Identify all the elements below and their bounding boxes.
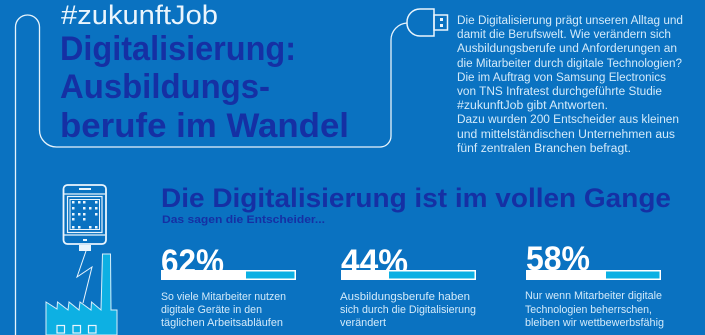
intro text block: Die Digitalisierung prägt unseren Alltag und	[457, 15, 683, 27]
stat: 44%: verändert	[340, 317, 386, 329]
stat: 58%: 58%	[526, 240, 590, 278]
section subheading: Das sagen die Entscheider...	[162, 214, 325, 226]
intro text block: damit die Berufswelt. Wie verändern sich	[457, 29, 671, 41]
stat: 58%	[525, 240, 664, 329]
title: Digitalisierung:	[60, 30, 296, 68]
cable line	[16, 15, 407, 335]
stat: 44%	[340, 243, 476, 329]
icon: tablet with charger	[64, 185, 106, 251]
stat: 62%	[161, 243, 296, 329]
icon: factory with lightning cable	[46, 251, 117, 335]
stat: 44%: 44%	[341, 243, 408, 281]
title: berufe im Wandel	[60, 107, 349, 145]
section heading: Die Digitalisierung ist im vollen Gange	[161, 183, 671, 213]
intro text block: die Mitarbeiter durch digitale Technologien?	[457, 58, 682, 70]
hashtag heading: #zukunftJob	[61, 0, 218, 30]
stat: 58%: Nur wenn Mitarbeiter digitale	[525, 290, 662, 302]
stat: 58%: Technologien beherrschen,	[525, 304, 652, 316]
title: Ausbildungs-	[60, 68, 270, 106]
stat: 62%: So viele Mitarbeiter nutzen	[161, 291, 286, 303]
intro text block: und mittelständischen Unternehmen aus	[457, 129, 675, 141]
stat: 44%: Ausbildungsberufe haben	[340, 291, 470, 303]
intro text block: Dazu wurden 200 Entscheider aus kleinen	[457, 114, 679, 126]
intro text block	[457, 15, 683, 155]
stat: 62%: 62%	[161, 243, 224, 281]
stat: 58%: bleiben wir wettbewerbsfähig	[525, 317, 664, 329]
stat: 44%: sich durch die Digitalisierung	[340, 304, 476, 316]
intro text block: Ausbildungsberufe und Anforderungen an	[457, 43, 677, 55]
stat: 62%: täglichen Arbeitsabläufen	[161, 317, 283, 329]
intro text block: Die im Auftrag von Samsung Electronics	[457, 72, 666, 84]
intro text block: von TNS Infratest durchgeführte Studie	[457, 86, 662, 98]
stat: 62%: digitale Geräte in den	[161, 304, 262, 316]
intro text block: fünf zentralen Branchen befragt.	[457, 143, 631, 155]
intro text block: #zukunftJob gibt Antworten.	[457, 100, 608, 112]
icon: plug	[407, 9, 448, 36]
title	[60, 30, 349, 145]
